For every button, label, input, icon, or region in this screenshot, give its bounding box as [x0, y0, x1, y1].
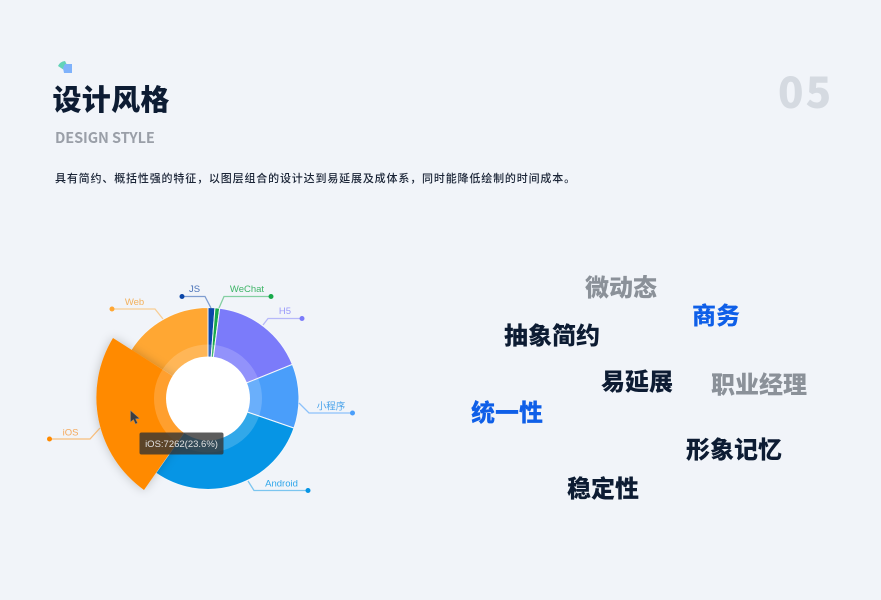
word: unity: 统一性 [471, 393, 543, 428]
word: visual memory: 形象记忆 [686, 430, 782, 465]
label: WeChat: WeChat [230, 284, 264, 295]
label: iOS: iOS [63, 428, 78, 438]
label: Android: Android [265, 478, 298, 490]
label: iOS [47, 428, 100, 442]
segment: WeChat [208, 308, 220, 398]
word: business: 商务 [692, 296, 740, 331]
word: extensible: 易延展 [601, 362, 673, 397]
label: mini program [299, 400, 355, 416]
label: mini program: 小程序 [317, 400, 346, 412]
segment: mini program [208, 364, 299, 428]
segment: H5 [208, 308, 292, 398]
segment: iOS highlighted [96, 338, 208, 490]
segment: Android [156, 398, 294, 489]
segment: Web [131, 308, 208, 398]
label: WeChat [219, 284, 274, 308]
label: Web [110, 297, 163, 319]
label: JS: JS [189, 284, 200, 295]
label: H5 [263, 306, 304, 325]
page number: 05 [778, 60, 833, 121]
segment: JS [208, 308, 215, 398]
word: professional manager: 职业经理 [711, 365, 807, 400]
icon: logo mark [58, 61, 72, 73]
word: stability: 稳定性 [567, 469, 639, 504]
label: Web: Web [125, 297, 144, 308]
subtitle: DESIGN STYLE [55, 127, 155, 148]
inner translucent ring [160, 350, 256, 446]
icon: mouse cursor [130, 410, 140, 424]
title: 设计风格 [52, 77, 170, 119]
tooltip [140, 432, 224, 454]
description text: 具有简约、概括性强的特征，以图层组合的设计达到易延展及成体系，同时能降低绘制的时间成本。 [55, 170, 576, 186]
label: H5: H5 [279, 306, 291, 317]
label: JS [180, 284, 211, 308]
label: Android [248, 478, 310, 493]
word: micro-motion: 微动态 [585, 268, 657, 303]
word: abstract and concise: 抽象简约 [504, 316, 600, 351]
center hole [166, 356, 250, 440]
tooltip: iOS:7262(23.6%) [145, 439, 218, 450]
